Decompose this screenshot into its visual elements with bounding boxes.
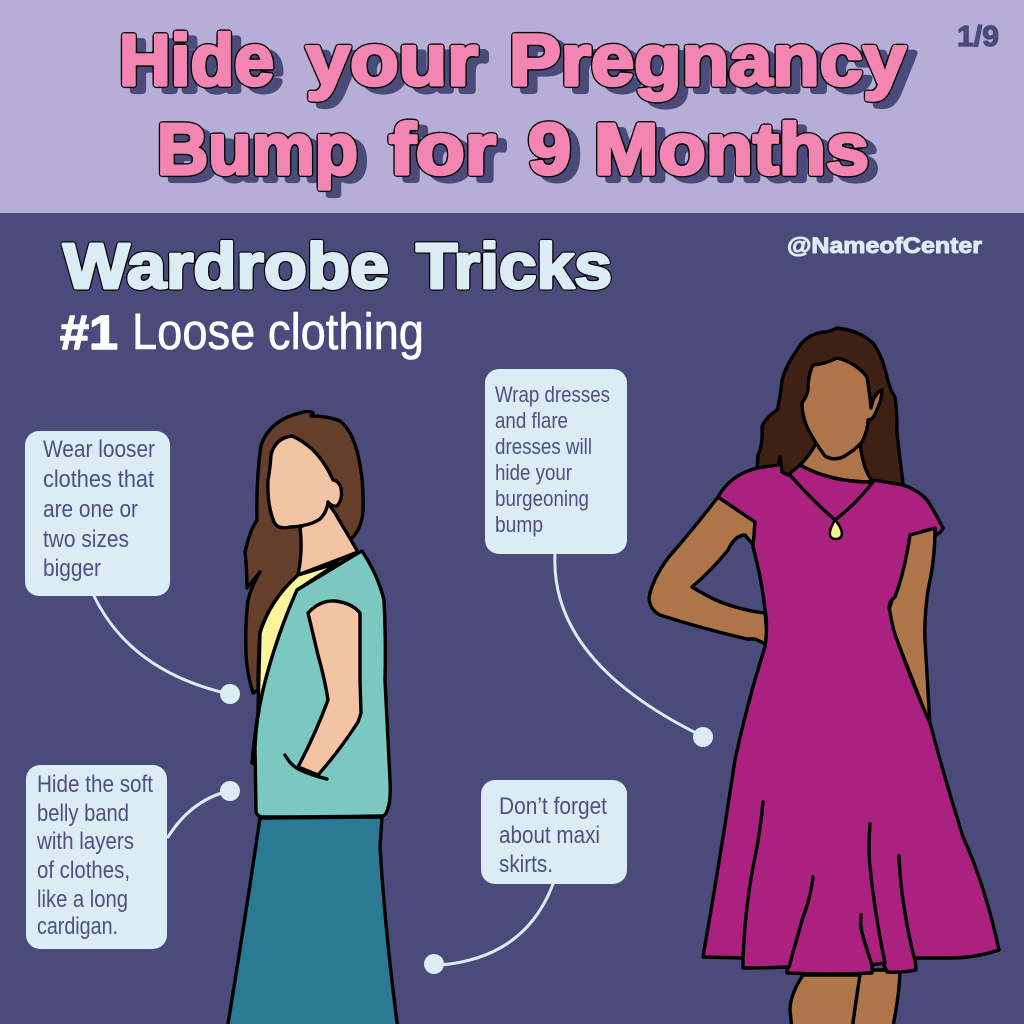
marker dot	[220, 684, 240, 704]
hair	[245, 412, 363, 693]
text: are one or	[43, 496, 138, 523]
title: your	[306, 21, 478, 101]
yellow top	[252, 563, 338, 764]
dress	[703, 457, 999, 974]
figure: woman in cardigan and maxi skirt	[227, 412, 398, 1024]
connector	[94, 596, 225, 693]
figure: woman in magenta flare dress	[649, 328, 999, 1024]
marker dot	[220, 781, 240, 801]
text: belly band	[37, 800, 129, 827]
title: 9	[528, 110, 571, 190]
text: about maxi	[499, 822, 600, 849]
title: for	[389, 110, 496, 190]
text: two sizes	[43, 526, 129, 553]
title: Pregnancy	[509, 21, 906, 101]
cardigan	[255, 551, 390, 817]
text: dresses will	[495, 434, 592, 459]
text: cardigan.	[37, 913, 118, 940]
text: bigger	[43, 555, 101, 582]
text: bump	[495, 512, 543, 537]
callout: belly band	[26, 765, 240, 949]
title: Months	[594, 110, 869, 190]
right arm	[889, 528, 935, 725]
marker dot	[424, 954, 444, 974]
legs	[790, 970, 900, 1024]
connector	[555, 554, 698, 734]
heading: Wardrobe Tricks	[63, 230, 612, 302]
text: burgeoning	[495, 486, 589, 511]
pendant	[830, 520, 842, 539]
box	[485, 369, 627, 554]
text	[499, 793, 607, 878]
text: Hide the soft	[37, 771, 153, 798]
text: Wear looser	[43, 436, 155, 463]
text	[36, 771, 153, 940]
page number: 1/9	[957, 21, 999, 53]
neck	[298, 503, 358, 575]
heading: Wardrobe Tricks: Tricks	[416, 230, 612, 302]
box	[25, 431, 170, 596]
face	[802, 358, 882, 459]
arm	[298, 601, 361, 775]
title: Bump	[157, 110, 358, 190]
text: with layers	[36, 828, 134, 855]
text: of clothes,	[37, 857, 130, 884]
dress folds	[743, 802, 915, 967]
callout: maxi skirts	[424, 780, 627, 974]
text: Don’t forget	[499, 793, 607, 820]
left arm	[649, 497, 768, 645]
subheading: #1 Loose clothing: #1	[60, 307, 118, 360]
text: and flare	[495, 408, 568, 433]
callout: wrap dresses	[485, 369, 713, 747]
title: Hide	[119, 21, 274, 101]
text	[495, 382, 610, 537]
callout: looser clothes	[25, 431, 240, 704]
skirt	[227, 817, 398, 1024]
necklace	[790, 475, 873, 520]
box	[481, 780, 627, 884]
face	[268, 436, 342, 528]
text: clothes that	[43, 466, 154, 493]
title	[119, 21, 906, 190]
text: like a long	[37, 886, 128, 913]
connector	[168, 792, 225, 837]
text: skirts.	[499, 851, 553, 878]
marker dot	[693, 727, 713, 747]
connector	[440, 884, 553, 965]
box	[26, 765, 167, 949]
text	[43, 436, 155, 582]
text: Wrap dresses	[495, 382, 610, 407]
subheading: #1 Loose clothing: Loose clothing	[132, 303, 424, 360]
neck	[800, 443, 873, 482]
header band	[0, 0, 1024, 213]
heading: Wardrobe Tricks: Wardrobe	[63, 230, 389, 302]
text: hide your	[495, 460, 572, 485]
pocket	[285, 755, 327, 779]
hair	[757, 328, 903, 490]
social handle: @NameofCenter	[787, 233, 982, 258]
